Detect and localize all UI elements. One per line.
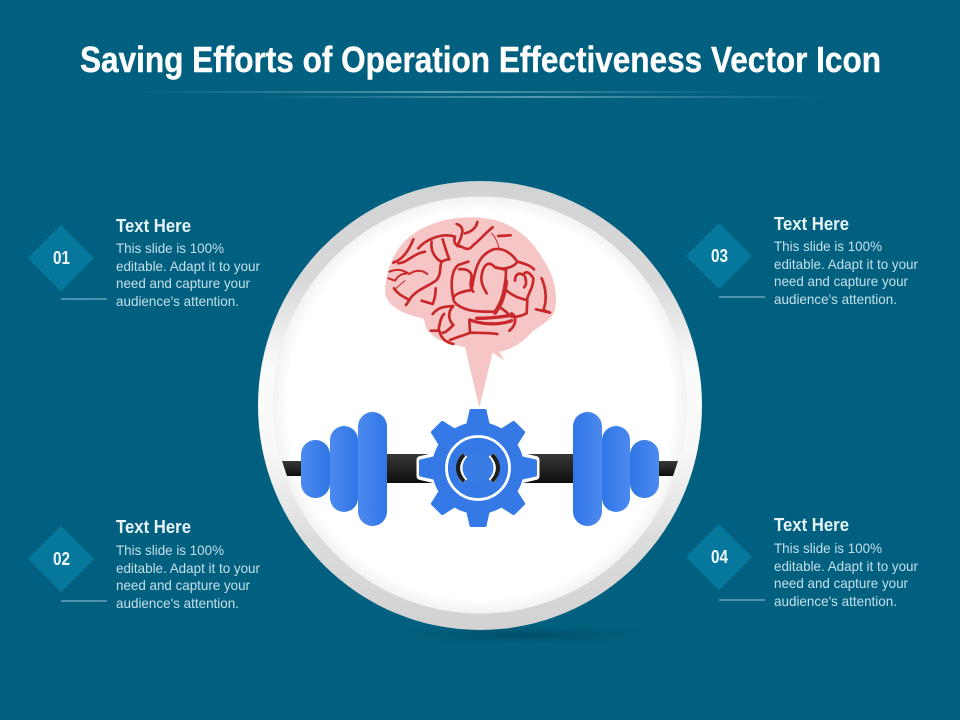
text block 01: This slide is 100% [116, 240, 224, 256]
text block 04: audience's attention. [774, 593, 897, 609]
text block 04: This slide is 100% [774, 540, 882, 556]
right weight plates [573, 412, 659, 526]
text block 02: Text Here [116, 517, 191, 537]
text block 04: Text Here [774, 515, 849, 535]
item 04 [686, 515, 918, 609]
text block 03: Text Here [774, 214, 849, 234]
central circle panel [258, 181, 702, 630]
text block 04: editable. Adapt it to your [774, 558, 918, 574]
item 01 [28, 216, 260, 309]
icon: dumbbell with gear [282, 410, 678, 526]
diamond 01 [28, 225, 94, 291]
text block 02: audience's attention. [116, 595, 239, 611]
text block 03: audience's attention. [774, 291, 897, 307]
diamond 03 [686, 223, 752, 289]
circle shadow [355, 623, 695, 647]
text block 01: editable. Adapt it to your [116, 258, 260, 274]
text block 02 [116, 517, 260, 611]
text block 03: need and capture your [774, 273, 908, 289]
text block 02: need and capture your [116, 577, 250, 593]
text block 03: This slide is 100% [774, 238, 882, 254]
left weight plates [301, 412, 387, 526]
text block 01 [116, 216, 260, 309]
text block 03: editable. Adapt it to your [774, 256, 918, 272]
text block 02: editable. Adapt it to your [116, 560, 260, 576]
diamond 02: 02 [53, 549, 70, 569]
diamond 02 [28, 526, 94, 592]
text block 04: need and capture your [774, 575, 908, 591]
item 02 [28, 517, 260, 611]
diamond 04 [686, 524, 752, 590]
diamond 04: 04 [711, 547, 728, 567]
icon: brain with speech pointer [385, 217, 556, 407]
text block 02: This slide is 100% [116, 542, 224, 558]
text block 03 [774, 214, 918, 307]
item 03 [686, 214, 918, 307]
text block 01: need and capture your [116, 275, 250, 291]
dumbbell bar [282, 454, 678, 483]
diamond 03: 03 [711, 246, 728, 266]
text block 04 [774, 515, 918, 609]
icon: gear [420, 410, 536, 526]
diamond 01: 01 [53, 248, 70, 268]
text block 01: audience's attention. [116, 293, 239, 309]
text block 01: Text Here [116, 216, 191, 236]
